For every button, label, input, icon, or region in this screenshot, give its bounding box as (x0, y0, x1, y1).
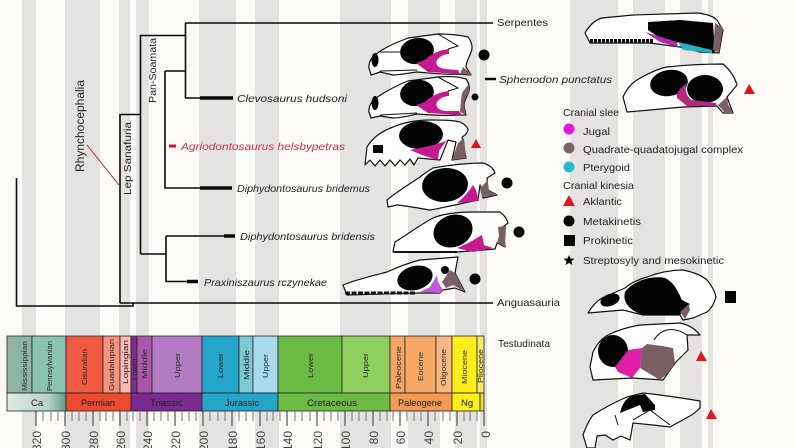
taxon labels: Clevosaurus hudsoni (237, 93, 348, 105)
taxon labels: Serpentes (497, 17, 548, 29)
epoch labels: Eocene (416, 352, 425, 381)
period labels: Cretaceous (307, 398, 357, 409)
marker: akinetic (696, 351, 707, 361)
legend: Cranial kinesia (563, 180, 634, 192)
age labels (30, 431, 493, 448)
age labels: 0 (479, 431, 493, 438)
pointer line: Rhynchocephalia (87, 145, 119, 185)
legend: Cranial slee (563, 107, 619, 119)
taxon labels: Anguasauria (497, 297, 560, 309)
skull: lower carnivoran (583, 393, 700, 448)
period labels: Paleogene (398, 398, 442, 409)
epoch labels: Oligocene (439, 349, 448, 386)
epoch labels: Middle (140, 349, 149, 379)
epoch labels (20, 339, 485, 391)
epoch labels: Guadalupian (107, 339, 116, 391)
period labels: Jurassic (225, 398, 259, 409)
legend: Prokinetic (583, 235, 633, 247)
period labels: Triassic (150, 398, 183, 409)
legend (563, 107, 744, 267)
skull: Testudinata (590, 323, 700, 380)
taxon labels: Praxiniszaurus rczynekae (204, 277, 327, 289)
marker: metakinetic (514, 226, 524, 238)
skull: Agriodontosaurus (365, 120, 468, 166)
age labels: 80 (367, 431, 381, 444)
epoch labels: Cisuralian (80, 349, 89, 385)
skull: Clevosaurus 2 (369, 77, 470, 118)
taxon labels: Testudinata (498, 338, 550, 350)
marker: metakinetic (470, 274, 480, 284)
legend: Jugal (583, 126, 610, 138)
taxon labels: Sphenodon punctatus (499, 74, 613, 86)
clade label: Lep Sanafuria: Lep Sanafuria (123, 121, 134, 195)
epoch labels: Upper (173, 352, 182, 378)
clade label: Rhynchocephalia: Rhynchocephalia (75, 79, 87, 172)
age labels: 40 (422, 431, 436, 444)
epoch labels: Upper (261, 353, 270, 378)
age ticks (36, 411, 484, 426)
period row (7, 393, 484, 411)
legend: Aklantic (583, 196, 622, 208)
marker: akinetic (471, 139, 481, 148)
taxon labels: Agriodontosaurus helsbypetras (180, 141, 346, 153)
marker: akinetic (744, 84, 755, 94)
period labels: Ng (461, 398, 473, 409)
period labels (31, 398, 473, 409)
epoch labels: Lower (306, 352, 315, 378)
marker: prokinetic (725, 291, 736, 303)
epoch labels: Lower (130, 357, 139, 380)
epoch labels: Pliocene (476, 349, 485, 383)
skull: Clevosaurus 1 (369, 34, 472, 75)
age labels: 60 (394, 431, 408, 444)
legend: Streptosyly and mesokinetic (583, 255, 724, 267)
marker: akinetic (706, 409, 717, 419)
skull: Praxiniszaurus (343, 257, 465, 295)
taxon labels: Diphydontosaurus bridensis (240, 231, 376, 243)
epoch labels: Lower (216, 352, 225, 378)
skull: Sphenodon (623, 64, 737, 113)
legend: Metakinetis (583, 216, 641, 228)
epoch row (7, 336, 484, 393)
age labels: 20 (451, 431, 465, 444)
skull: Diphydontosaurus bridemus (387, 163, 497, 210)
period labels: Ca (31, 398, 44, 409)
skull: Diphydontosaurus bridensis (393, 209, 508, 253)
skull: Anguasauria (588, 270, 716, 320)
period labels: Permian (81, 398, 115, 409)
phylogenetic tree (16, 23, 496, 306)
epoch labels: Middle (242, 350, 251, 380)
epoch labels: Mississippian (20, 341, 29, 391)
legend: Quadrate-quadatojugal complex (583, 144, 744, 156)
epoch labels: Paleocene (394, 346, 403, 389)
marker: metakinetic (478, 50, 490, 60)
legend: Pterygoid (583, 162, 630, 174)
clade label: Pan-Soamata: Pan-Soamata (148, 38, 159, 103)
epoch labels: Miocene (460, 350, 469, 384)
geologic time scale (7, 336, 493, 448)
taxon labels (180, 17, 613, 350)
marker: metakinetic (502, 178, 512, 188)
epoch labels: Upper (361, 352, 370, 378)
epoch labels: Lopingian (121, 340, 130, 384)
marker: metakinetic small (472, 94, 478, 100)
skull: Serpentes (585, 13, 723, 53)
taxon labels: Diphydontosaurus bridemus (237, 183, 371, 195)
epoch labels: Pennsylvanian (45, 341, 54, 391)
